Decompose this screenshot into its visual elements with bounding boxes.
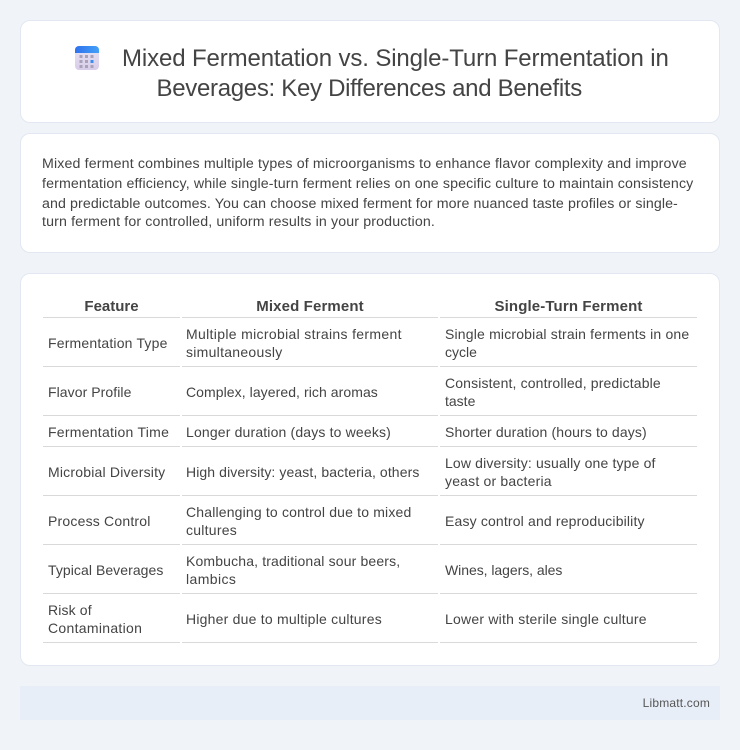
text: Longer duration (days to weeks) [186,424,391,440]
text: Single microbial strain ferments in one [445,326,689,342]
text: Challenging to control due to mixed [186,504,411,520]
text: cultures [186,522,237,538]
row: fermentation time: Fermentation Time [48,424,169,440]
icon: calendar [75,46,99,70]
text: taste [445,393,475,409]
table header: Mixed Ferment [256,298,364,315]
row: flavor profile: Flavor Profile [48,384,131,400]
title: Mixed Fermentation vs. Single-Turn Fermentation in [122,45,669,72]
text: lambics [186,571,236,587]
intro text: and predictable outcomes. You can choose mixed ferment for more nuanced taste profiles or single- [42,196,678,212]
text: Complex, layered, rich aromas [186,384,378,400]
text: Consistent, controlled, predictable [445,375,661,391]
comparison table panel [20,273,720,666]
title [122,45,669,102]
row: typical beverages: Typical Beverages [48,562,163,578]
footer text: Libmatt.com [643,696,710,710]
text: Shorter duration (hours to days) [445,424,647,440]
text: Kombucha, traditional sour beers, [186,553,400,569]
title: Beverages: Key Differences and Benefits [156,75,582,102]
row: process control: Process Control [48,513,151,529]
footer bar [20,686,720,720]
row: risk of contamination: Risk of [48,602,92,618]
text: Easy control and reproducibility [445,513,645,529]
intro text: fermentation efficiency, while single-turn ferment relies on one specific culture to maintain consistency [42,176,693,192]
text: Multiple microbial strains ferment [186,326,402,342]
intro text: Mixed ferment combines multiple types of microorganisms to enhance flavor complexity and improve [42,156,687,172]
row: risk of contamination [48,602,142,636]
text: yeast or bacteria [445,473,552,489]
text: simultaneously [186,344,283,360]
text: Wines, lagers, ales [445,562,562,578]
text: Higher due to multiple cultures [186,611,382,627]
header panel [20,20,720,123]
text: Lower with sterile single culture [445,611,647,627]
table header: Single-Turn Ferment [494,298,643,315]
row: risk of contamination: Contamination [48,620,142,636]
row: microbial diversity: Microbial Diversity [48,464,165,480]
intro text: turn ferment for controlled, uniform results in your production. [42,214,435,230]
intro text [42,156,694,230]
text: Low diversity: usually one type of [445,455,656,471]
intro panel [20,133,720,253]
table header [84,298,643,315]
table header: Feature [84,298,139,315]
text: High diversity: yeast, bacteria, others [186,464,419,480]
text: cycle [445,344,477,360]
row: fermentation type: Fermentation Type [48,335,168,351]
